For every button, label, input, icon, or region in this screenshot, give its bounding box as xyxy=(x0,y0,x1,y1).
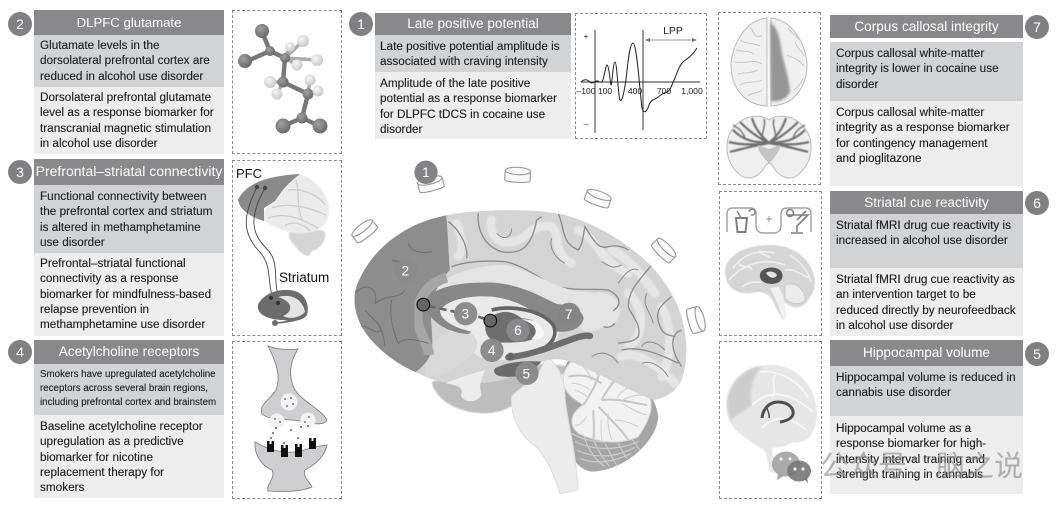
molecule: glutamate xyxy=(238,24,328,134)
optic chiasm and pituitary xyxy=(445,370,485,401)
text: LPP biomarker: Amplitude of the late positive xyxy=(380,77,530,90)
text: LPP finding: associated with craving intensity xyxy=(380,55,548,68)
lower temporal base xyxy=(432,363,578,413)
chart labels xyxy=(576,25,703,129)
badge 4 xyxy=(8,340,32,364)
text: glutamate biomarker: Dorsolateral prefrontal glutamate xyxy=(40,91,211,104)
illustration box: hippocampus xyxy=(719,341,822,499)
text: glutamate biomarker: transcranial magnetic stimulation xyxy=(40,122,211,135)
text: callosal biomarker: Corpus callosal white-matter xyxy=(836,106,984,119)
text: hippocampal finding: Hippocampal volume is reduced in xyxy=(836,371,1016,384)
illustration box: PFC and striatum xyxy=(232,160,342,336)
central brain illustration with numbered regions: 7 xyxy=(565,307,572,322)
numbered region markers xyxy=(394,161,581,385)
chart labels: –100 xyxy=(576,86,596,96)
subcallosal gyri xyxy=(452,332,478,352)
text: glutamate biomarker xyxy=(34,87,224,154)
gyri highlights xyxy=(457,220,675,383)
text: callosal finding: Corpus callosal white-matter xyxy=(836,47,984,60)
text: connectivity biomarker: biomarker for mindfulness-based xyxy=(40,288,211,301)
badge 3 xyxy=(8,160,32,184)
heading: Late positive potential xyxy=(375,13,571,35)
text: striatal finding: Striatal fMRI drug cue reactivity is xyxy=(836,219,1011,232)
text: striatal finding: increased in alcohol use disorder xyxy=(836,234,1008,247)
panel: Striatal cue reactivity xyxy=(830,191,1049,336)
illustration: PFC to striatum connectivity xyxy=(236,166,329,326)
text: LPP finding: Late positive potential amplitude is xyxy=(380,40,560,53)
amygdala xyxy=(494,361,542,377)
panel: DLPFC glutamate xyxy=(8,10,224,154)
text: acetylcholine finding xyxy=(34,364,224,415)
illustration box: LPP chart xyxy=(575,13,707,139)
text: acetylcholine biomarker xyxy=(34,415,224,498)
badge 6: 6 xyxy=(1033,195,1041,211)
badge 1: 1 xyxy=(357,16,365,32)
chart: late positive potential waveform xyxy=(576,25,703,133)
text: glutamate finding: reduced in alcohol use disorder xyxy=(40,70,203,83)
text: connectivity biomarker: connectivity as a response xyxy=(40,272,178,285)
thalamus and striatum xyxy=(486,309,553,348)
illustration: alcohol cues and brain xyxy=(725,208,815,320)
text: hippocampal biomarker xyxy=(830,416,1023,494)
text: callosal finding: integrity is lower in cocaine use xyxy=(836,62,999,75)
central brain illustration with numbered regions xyxy=(345,161,707,494)
text: hippocampal biomarker: Hippocampal volume as a xyxy=(836,422,971,435)
heading: Striatal cue reactivity xyxy=(830,191,1023,214)
heading: Prefrontal-striatal connectivity xyxy=(34,159,224,185)
badge 2: 2 xyxy=(16,16,24,32)
prefrontal cingulate arc xyxy=(417,277,447,355)
badge 3: 3 xyxy=(16,164,24,180)
text: connectivity biomarker: Prefrontal–striatal functional xyxy=(40,257,186,270)
heading: Acetylcholine receptors: Acetylcholine receptors xyxy=(59,344,199,359)
heading: Late positive potential: Late positive potential xyxy=(407,16,539,31)
panel: Corpus callosal integrity xyxy=(830,15,1049,186)
watermark: text: 公众号：脑之说 xyxy=(820,450,1023,483)
central brain illustration with numbered regions: 3 xyxy=(462,306,469,321)
panel: Prefrontal-striatal connectivity xyxy=(8,159,224,336)
illustration: synapse xyxy=(255,346,327,492)
label: Striatum: Striatum xyxy=(279,270,329,285)
badge 4: 4 xyxy=(16,344,24,360)
text: striatal finding xyxy=(830,214,1023,268)
central brain illustration with numbered regions: 6 xyxy=(514,323,522,338)
cerebellum xyxy=(563,350,658,472)
badge 6 xyxy=(1025,191,1049,215)
illustration: top view and coronal brain xyxy=(727,18,811,178)
text: acetylcholine finding: including prefrontal cortex and brainstem xyxy=(40,397,216,408)
heading: Acetylcholine receptors xyxy=(34,340,224,364)
text: callosal biomarker: for contingency management xyxy=(836,137,988,150)
text: acetylcholine biomarker: Baseline acetylcholine receptor xyxy=(40,420,203,433)
heading: Prefrontal-striatal connectivity: Prefrontal–striatal connectivity xyxy=(36,163,222,179)
central brain illustration with numbered regions: 4 xyxy=(488,343,496,358)
heading: Hippocampal volume: Hippocampal volume xyxy=(863,345,990,360)
central brain illustration with numbered regions: 1 xyxy=(422,165,430,180)
text: acetylcholine biomarker: smokers xyxy=(40,481,84,494)
badge 7: 7 xyxy=(1033,19,1041,35)
label: PFC: PFC xyxy=(236,166,262,181)
text: LPP biomarker: for DLPFC tDCS in cocaine use xyxy=(380,108,545,121)
inner light space xyxy=(440,293,558,360)
icon: cocktail xyxy=(786,210,808,233)
heading: Corpus callosal integrity: Corpus callosal integrity xyxy=(854,19,999,34)
text: connectivity biomarker: methamphetamine use disorder xyxy=(40,318,205,331)
text: hippocampal finding xyxy=(830,366,1023,416)
text: LPP biomarker: potential as a response biomarker xyxy=(380,92,557,105)
text: striatal biomarker: reduced directly by neurofeedback xyxy=(836,304,1016,317)
text: connectivity finding: the prefrontal cortex and striatum xyxy=(40,205,212,218)
heading: DLPFC glutamate xyxy=(34,10,224,35)
chart labels: – xyxy=(584,119,589,129)
text: hippocampal biomarker: strength training in cannabis xyxy=(836,468,983,481)
text: connectivity finding: is altered in methamphetamine xyxy=(40,221,201,234)
chart labels: 700 xyxy=(657,86,671,96)
text: LPP finding xyxy=(375,35,571,72)
text: callosal finding xyxy=(830,42,1023,101)
text: LPP biomarker xyxy=(375,72,571,139)
text: connectivity finding: use disorder xyxy=(40,236,105,249)
badge 5: 5 xyxy=(1033,346,1041,362)
heading: DLPFC glutamate: DLPFC glutamate xyxy=(77,15,181,30)
hippocampus tract xyxy=(508,336,590,357)
text: connectivity finding: Functional connectivity between xyxy=(40,190,207,203)
text: striatal biomarker xyxy=(830,268,1023,336)
text: callosal biomarker xyxy=(830,101,1023,186)
text: glutamate biomarker: level as a response biomarker for xyxy=(40,106,214,119)
panel: Late positive potential xyxy=(349,12,571,139)
text: acetylcholine finding: receptors across several brain regions, xyxy=(40,383,208,394)
text: glutamate biomarker: in alcohol use disorder xyxy=(40,137,158,150)
illustration box: synapse xyxy=(232,341,342,499)
connection dots xyxy=(417,298,497,327)
cerebral cortex xyxy=(354,210,686,400)
illustration box: molecule xyxy=(232,10,342,154)
chart labels: 400 xyxy=(628,86,642,96)
text: acetylcholine biomarker: upregulation as a predictive xyxy=(40,435,184,448)
prefrontal cortex overlay xyxy=(354,215,450,372)
illustration box: cue reactivity xyxy=(719,191,822,336)
text: acetylcholine finding: Smokers have upregulated acetylcholine xyxy=(40,369,216,380)
central brain illustration with numbered regions: 5 xyxy=(523,366,531,381)
chart labels: + xyxy=(583,31,589,41)
text: striatal biomarker: in alcohol use disorder xyxy=(836,319,954,332)
icon: soft drink xyxy=(727,208,811,233)
plus sign: + xyxy=(765,212,773,226)
badge 5 xyxy=(1025,342,1049,366)
text: connectivity finding xyxy=(34,185,224,253)
text: connectivity biomarker xyxy=(34,253,224,336)
text: hippocampal finding: cannabis use disorder xyxy=(836,386,951,399)
illustration: hippocampus brain xyxy=(727,365,817,473)
text: striatal biomarker: an intervention target to be xyxy=(836,288,976,301)
illustration box: callosum xyxy=(718,12,821,185)
text: hippocampal biomarker: intensity interval training and xyxy=(836,453,985,466)
chart labels: 1,000 xyxy=(681,86,703,96)
text: glutamate finding xyxy=(34,35,224,87)
text: glutamate finding: Glutamate levels in the xyxy=(40,39,160,52)
text: connectivity biomarker: relapse prevention in xyxy=(40,303,149,316)
cingulate gyrus xyxy=(428,265,613,332)
text: hippocampal biomarker: response biomarker for high- xyxy=(836,437,986,450)
electrodes xyxy=(350,167,707,334)
text: acetylcholine biomarker: biomarker for nicotine xyxy=(40,451,153,464)
badge 7 xyxy=(1025,15,1049,39)
central brain illustration with numbered regions: 2 xyxy=(402,263,409,278)
badge 2 xyxy=(8,12,32,36)
heading: Striatal cue reactivity: Striatal cue reactivity xyxy=(864,195,989,210)
heading: Corpus callosal integrity xyxy=(830,15,1023,38)
text: callosal finding: disorder xyxy=(836,78,878,91)
chart labels: LPP xyxy=(663,25,683,37)
chart labels: 100 xyxy=(598,86,612,96)
text: callosal biomarker: and pioglitazone xyxy=(836,152,922,165)
panel: Acetylcholine receptors xyxy=(8,340,224,498)
heading: Hippocampal volume xyxy=(830,340,1023,366)
badge 1 xyxy=(349,12,373,36)
corpus callosum xyxy=(425,282,584,334)
watermark: WeChat logo xyxy=(772,452,811,483)
text: glutamate finding: dorsolateral prefrontal cortex are xyxy=(40,54,210,67)
text: acetylcholine biomarker: replacement therapy for xyxy=(40,466,164,479)
text: LPP biomarker: disorder xyxy=(380,123,422,136)
panel: Hippocampal volume xyxy=(830,340,1049,494)
brainstem xyxy=(511,357,578,494)
text: striatal biomarker: Striatal fMRI drug cue reactivity as xyxy=(836,273,1015,286)
text: callosal biomarker: integrity as a response biomarker xyxy=(836,121,1010,134)
